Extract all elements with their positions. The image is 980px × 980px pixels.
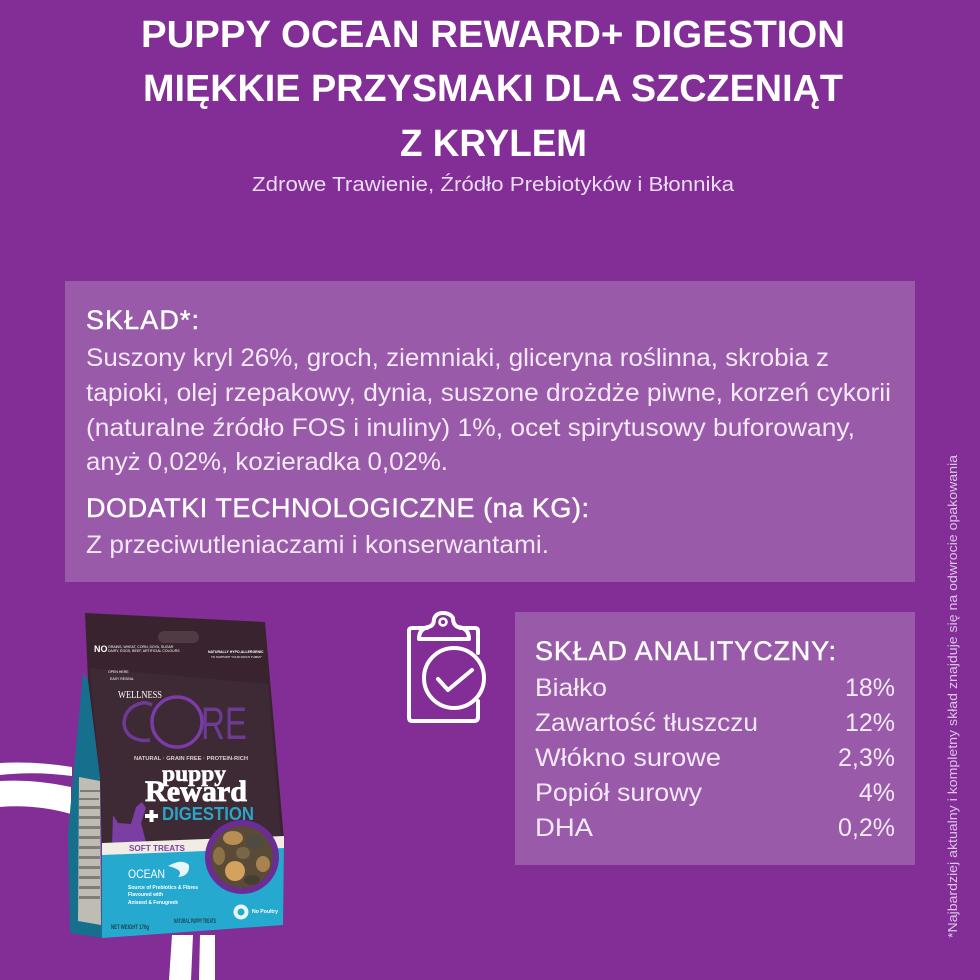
title: PUPPY OCEAN REWARD+ DIGESTION: [141, 14, 845, 56]
small top text: [94, 644, 264, 681]
ocean text: Flavoured with: [128, 892, 163, 898]
small top text: EASY RESEAL: [110, 677, 134, 681]
subtitle: Zdrowe Trawienie, Źródło Prebiotyków i Błonnika: [252, 173, 735, 196]
row: DHA: 0,2%: [838, 814, 895, 842]
additives text: Z przeciwutleniaczami i konserwantami.: [86, 531, 549, 559]
ingredients text: tapioki, olej rzepakowy, dynia, suszone drożdże piwne, korzeń cykorii: [86, 379, 891, 407]
no poultry badge: [234, 904, 279, 920]
small top text: NATURALLY HYPO-ALLERGENIC: [208, 650, 264, 654]
ocean text: Source of Prebiotics & Fibres: [128, 885, 198, 891]
row: fibre: 2,3%: [838, 744, 895, 772]
panel: ingredients: [65, 281, 915, 582]
brand logo: RE: [201, 698, 247, 749]
small top text: OPEN HERE: [108, 670, 129, 674]
small top text: TO SUPPORT YOUR DOG'S TUMMY: [211, 655, 262, 659]
ocean text: Aniseed & Fenugreek: [128, 900, 178, 906]
row: ash: Popiół surowy: [535, 779, 703, 807]
ingredients text: Suszony kryl 26%, groch, ziemniaki, gliceryna roślinna, skrobia z: [86, 344, 829, 372]
brand logo: [118, 690, 248, 762]
row: protein: [535, 674, 895, 702]
product name: puppy: [162, 761, 227, 786]
vertical footnote: *Najbardziej aktualny i kompletny skład znajduje się na odwrocie opakowania: [946, 455, 960, 938]
small top text: GRAINS, WHEAT, CORN, SOYA, SUGAR: [108, 645, 174, 649]
ocean text: [111, 862, 216, 931]
row: fat: 12%: [845, 709, 895, 737]
product name: DIGESTION: [162, 804, 254, 824]
title: Z KRYLEM: [400, 123, 587, 165]
row: fibre: Włókno surowe: [535, 744, 721, 772]
row: DHA: [535, 814, 895, 842]
bag gusset: [68, 673, 102, 938]
heading: analytical composition: SKŁAD ANALITYCZNY:: [535, 636, 836, 666]
row: fat: [535, 709, 895, 737]
blue lower panel: [102, 840, 284, 938]
heading: composition: SKŁAD*:: [86, 305, 199, 335]
row: protein: Białko: [535, 674, 607, 702]
row: fibre: [535, 744, 895, 772]
row: fat: Zawartość tłuszczu: [535, 709, 758, 737]
row: DHA: DHA: [535, 814, 593, 842]
ocean text: OCEAN: [128, 867, 165, 881]
product bag: [68, 613, 284, 938]
icon: clipboard with check mark: [409, 613, 484, 721]
ocean text: NET WEIGHT 170g: [111, 925, 149, 931]
bag front: [85, 613, 284, 848]
brand logo: NATURAL · GRAIN FREE · PROTEIN-RICH: [134, 756, 248, 762]
small top text: DAIRY, EGGS, BEEF, ARTIFICIAL COLOURS: [108, 649, 180, 653]
row: ash: [535, 779, 895, 807]
soft treats: SOFT TREATS: [129, 844, 186, 853]
heading: technological additives: DODATKI TECHNOLOGICZNE (na KG):: [86, 493, 589, 523]
treats window: [205, 820, 279, 894]
row: protein: 18%: [845, 674, 895, 702]
back label on gusset: [78, 777, 101, 925]
title: MIĘKKIE PRZYSMAKI DLA SZCZENIĄT: [143, 68, 843, 110]
dog silhouette: [112, 802, 146, 846]
ingredients text: anyż 0,02%, kozieradka 0,02%.: [86, 448, 448, 476]
no poultry badge: No Poultry: [252, 909, 279, 915]
panel: analytical composition: [515, 612, 915, 865]
ingredients text: [86, 344, 891, 476]
product name: Reward: [145, 775, 247, 808]
white band: [102, 836, 284, 855]
hang hole: [158, 631, 199, 643]
brand logo: WELLNESS: [118, 690, 162, 701]
small top text: NO: [94, 644, 108, 654]
product name: [145, 761, 254, 824]
row: ash: 4%: [859, 779, 895, 807]
title: [141, 14, 845, 165]
ingredients text: (naturalne źródło FOS i inuliny) 1%, ocet spirytusowy buforowany,: [86, 414, 855, 442]
decorative ribbons left: [0, 762, 215, 980]
ocean text: NATURAL PUPPY TREATS: [174, 919, 216, 925]
